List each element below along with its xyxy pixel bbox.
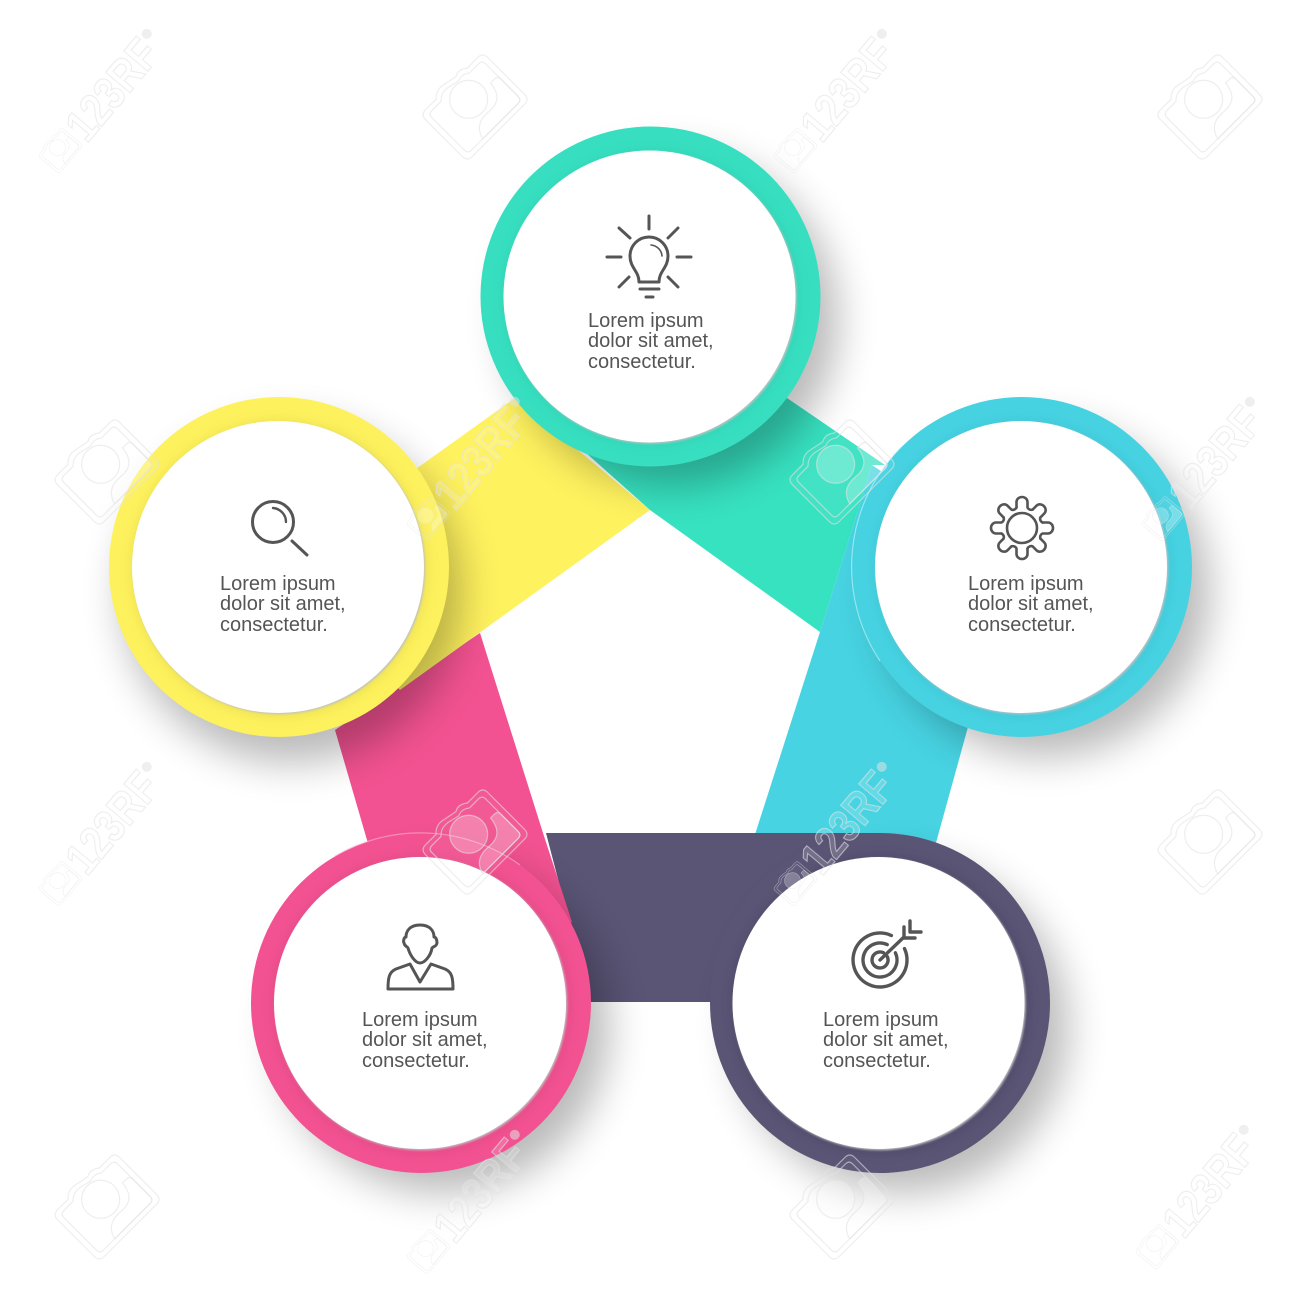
stock photo watermarks: 123RF: [1158, 396, 1272, 519]
stock photo watermarks: 123RF: [55, 761, 169, 884]
text: target label: consectetur.: [823, 1050, 931, 1072]
text: settings label: Lorem ipsum: [968, 573, 1084, 595]
stock photo watermarks: 123RF: [55, 28, 169, 151]
icon: target with arrow: [853, 921, 921, 987]
text: target label: Lorem ipsum: [823, 1009, 939, 1031]
text: idea label: dolor sit amet,: [588, 330, 714, 352]
panel: search circle: [109, 397, 449, 737]
band: navy: [546, 833, 880, 1002]
panel: idea circle: [480, 126, 820, 466]
text: person label: consectetur.: [362, 1050, 470, 1072]
stock photo watermarks: 123RF: [790, 761, 904, 884]
text: search label: Lorem ipsum: [220, 573, 336, 595]
stock photo watermarks: 123RF: [790, 28, 904, 151]
band: teal: [585, 296, 885, 632]
stock photo watermarks: 123RF: [1152, 1124, 1266, 1247]
band: blue: [750, 465, 1022, 850]
panel: person circle: [251, 833, 591, 1173]
text: search label: dolor sit amet,: [220, 593, 346, 615]
text: person label: dolor sit amet,: [362, 1029, 488, 1051]
band: pink: [335, 633, 572, 1003]
icon: gear: [991, 497, 1053, 559]
panel: settings circle: [852, 397, 1192, 737]
icon: magnifying glass: [252, 502, 307, 555]
text: target label: dolor sit amet,: [823, 1029, 949, 1051]
text: idea label: consectetur.: [588, 351, 696, 373]
icon: person: [388, 925, 453, 989]
text: settings label: consectetur.: [968, 614, 1076, 636]
text: idea label: Lorem ipsum: [588, 310, 704, 332]
text: settings label: dolor sit amet,: [968, 593, 1094, 615]
stock photo watermarks: 123RF: [423, 1129, 537, 1252]
text: search label: consectetur.: [220, 614, 328, 636]
circle drop shadows: [122, 154, 1210, 1193]
icon: light bulb: [607, 216, 691, 297]
panel: target circle: [710, 833, 1050, 1173]
text: person label: Lorem ipsum: [362, 1009, 478, 1031]
stock photo watermarks: 123RF: [423, 396, 537, 519]
band: yellow: [279, 398, 650, 690]
connecting bands: [279, 296, 1022, 1003]
